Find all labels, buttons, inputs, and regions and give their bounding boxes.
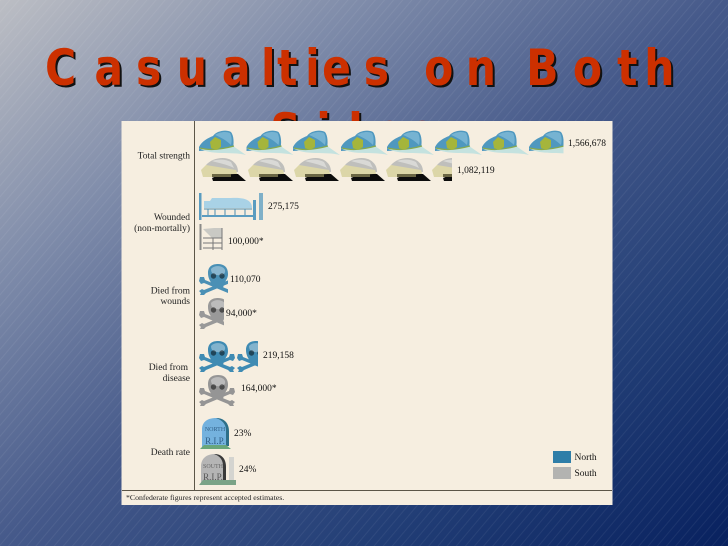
title [45,39,677,163]
value: south total strength: 1,082,119 [457,166,495,176]
value: south wounded: 100,000* [228,237,264,247]
icons: north skulls disease [199,341,258,372]
legend: South [574,469,597,479]
icon: south bed [200,224,222,250]
title: CasualtiesonBoth [47,41,677,99]
row label: died from disease: Died from [149,362,189,373]
value: north total strength: 1,566,678 [568,139,606,149]
row label: died from wounds: wounds [160,297,190,307]
icon: south tombstone: SOUTH [203,464,224,470]
icon: south skull wounds [199,298,224,329]
row label: death rate: Death rate [151,448,190,458]
icon: north bed [199,193,263,220]
row label: died from wounds: Died from [151,286,191,296]
row label: wounded [134,213,190,234]
icon: north tombstone [200,418,231,449]
icon: south skull disease [199,375,235,406]
icon: north skull wounds [199,264,228,295]
row label: died from disease: disease [163,374,190,384]
row label: died from wounds [151,286,191,307]
value: north died from disease: 219,158 [263,351,294,361]
icons: north total strength hats [199,131,576,155]
icon: north tombstone: NORTH [205,427,226,433]
value: south died from disease: 164,000* [241,384,277,394]
row label: total strength: Total strength [138,152,190,162]
icon: south tombstone: R.I.P. [203,472,223,482]
icon: south tombstone [199,454,236,485]
icons: south total strength caps [201,158,477,181]
row label: wounded: Wounded [154,213,190,223]
value: north wounded: 275,175 [268,202,299,212]
row label: died from disease [149,362,190,384]
icon: north tombstone: R.I.P. [205,436,225,446]
title: Sides [272,105,437,163]
value: north death rate: 23% [234,429,252,439]
value: north died from wounds: 110,070 [230,275,261,285]
legend [553,451,597,479]
value: south died from wounds: 94,000* [226,309,257,319]
title: CasualtiesonBoth [45,39,675,97]
legend: North [574,453,597,463]
footnote: *Confederate figures represent accepted estimates. [126,493,284,502]
title: Sides [270,103,435,161]
value: south death rate: 24% [239,465,256,475]
row label: wounded: (non-mortally) [134,223,190,234]
panel: casualties chart [122,121,612,505]
